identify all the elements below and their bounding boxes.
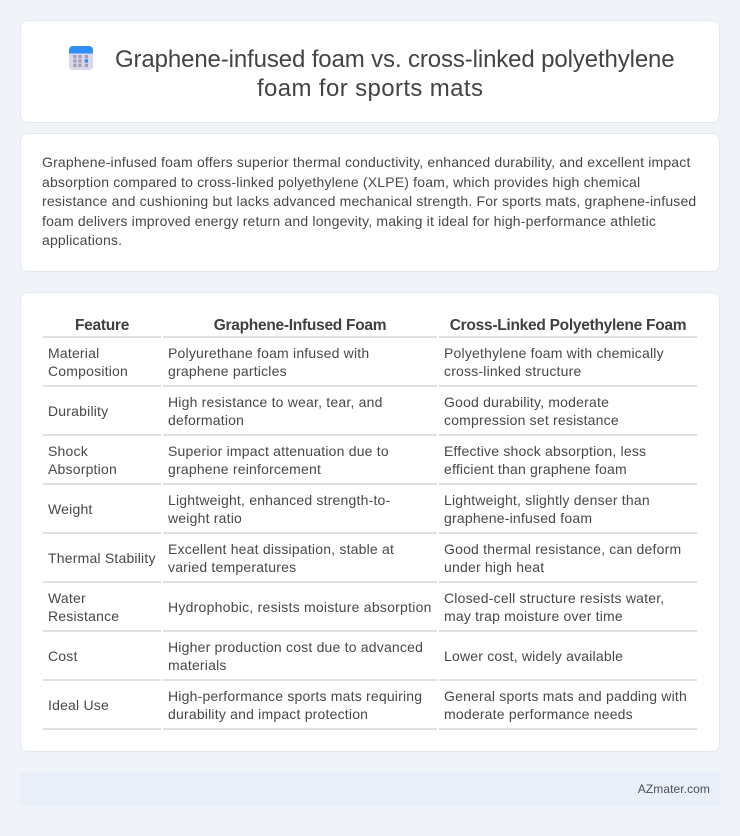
row: shock absorption: Effective shock absorption, less [444,442,646,458]
row: thermal stability [43,540,697,583]
row: cost: Cost [48,648,78,664]
row: durability: deformation [168,412,244,428]
row: weight: Weight [48,500,93,516]
row: durability: Durability [48,402,108,418]
summary text: absorption compared to cross-linked polyethylene (XLPE) foam, which provides high chemical [42,174,640,190]
header: feature [43,309,161,338]
summary text [42,154,696,248]
row: thermal stability: Thermal Stability [48,550,156,566]
row: weight: Lightweight, slightly denser than [444,492,650,508]
row: ideal use: moderate performance needs [444,706,633,722]
title: foam for sports mats [257,75,483,102]
row: shock absorption: Superior impact attenuation due to [168,442,389,458]
row: material composition: Polyethylene foam with chemically [444,344,664,360]
row: material composition: Composition [48,362,128,378]
row: cost: Higher production cost due to advanced [168,638,423,654]
panel: summary [20,133,720,272]
header: cross-linked polyethylene foam [439,309,697,338]
header: graphene-infused foam [163,309,437,338]
row: water resistance: Water [48,590,86,606]
row: water resistance: Resistance [48,608,119,624]
row: weight: graphene-infused foam [444,510,592,526]
row: water resistance: Closed-cell structure resists water, [444,590,664,606]
row: ideal use: High-performance sports mats requiring [168,688,422,704]
row: material composition: cross-linked structure [444,362,581,378]
row: material composition: graphene particles [168,362,287,378]
footer bar [20,772,720,806]
row: ideal use: Ideal Use [48,696,109,712]
table header [43,317,697,338]
row: weight: weight ratio [168,510,242,526]
summary text: applications. [42,232,122,248]
row: cost [43,638,697,681]
row: durability: High resistance to wear, tear, and [168,394,383,410]
row: weight: Lightweight, enhanced strength-to- [168,492,390,508]
row: thermal stability: varied temperatures [168,558,296,574]
row: water resistance [43,590,697,632]
row: ideal use: durability and impact protection [168,706,368,722]
row: cost: Lower cost, widely available [444,648,623,664]
row: material composition: Polyurethane foam infused with [168,344,369,360]
row: material composition [43,344,697,387]
summary text: Graphene-infused foam offers superior thermal conductivity, enhanced durability, and excellent impact [42,154,691,170]
summary text: resistance and cushioning but lacks advanced mechanical strength. For sports mats, graphene-infused [42,193,696,209]
row: shock absorption: Absorption [48,460,117,476]
title: Graphene-infused foam vs. cross-linked polyethylene [115,46,675,73]
row: durability [43,394,697,436]
row: ideal use: General sports mats and padding with [444,688,687,704]
row: material composition: Material [48,344,99,360]
row: shock absorption [43,442,697,485]
row: ideal use [43,688,697,730]
row: shock absorption: efficient than graphene foam [444,460,627,476]
row: durability: Good durability, moderate [444,394,609,410]
row: weight [43,492,697,534]
row: thermal stability: Excellent heat dissipation, stable at [168,540,394,556]
row: water resistance: Hydrophobic, resists moisture absorption [168,598,432,614]
panel: comparison table [20,292,720,752]
header: cross-linked polyethylene foam: Cross-Linked Polyethylene Foam [450,317,686,334]
panel: title [20,20,720,123]
row: water resistance: may trap moisture over time [444,608,623,624]
header: graphene-infused foam: Graphene-Infused Foam [214,317,386,334]
icon: calendar [69,46,93,70]
row: shock absorption: Shock [48,442,88,458]
row: cost: materials [168,656,227,672]
row: durability: compression set resistance [444,412,619,428]
title [115,46,675,102]
row: shock absorption: graphene reinforcement [168,460,321,476]
summary text: foam delivers improved energy return and longevity, making it ideal for high-performance athletic [42,212,656,228]
header: feature: Feature [75,317,129,334]
row: thermal stability: Good thermal resistance, can deform [444,540,681,556]
footer: source credit: AZmater.com [638,782,710,796]
row: thermal stability: under high heat [444,558,544,574]
